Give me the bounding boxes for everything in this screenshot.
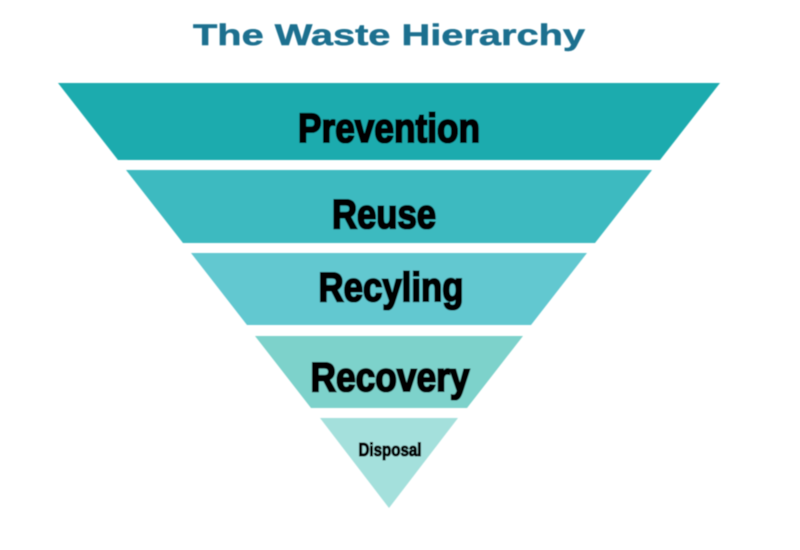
tier: recovery xyxy=(255,336,523,408)
inverted pyramid diagram xyxy=(58,83,720,508)
tier: disposal: Disposal xyxy=(358,440,422,460)
tier: disposal xyxy=(320,418,458,508)
tier: reuse: Reuse xyxy=(332,191,436,237)
tier: recovery: Recovery xyxy=(310,354,470,400)
tier: recycling: Recyling xyxy=(318,264,464,310)
title: The Waste Hierarchy xyxy=(193,19,585,52)
tier: prevention: Prevention xyxy=(298,105,480,151)
tier: prevention xyxy=(58,83,720,160)
tier: recycling xyxy=(191,253,587,325)
tier: reuse xyxy=(126,170,652,243)
